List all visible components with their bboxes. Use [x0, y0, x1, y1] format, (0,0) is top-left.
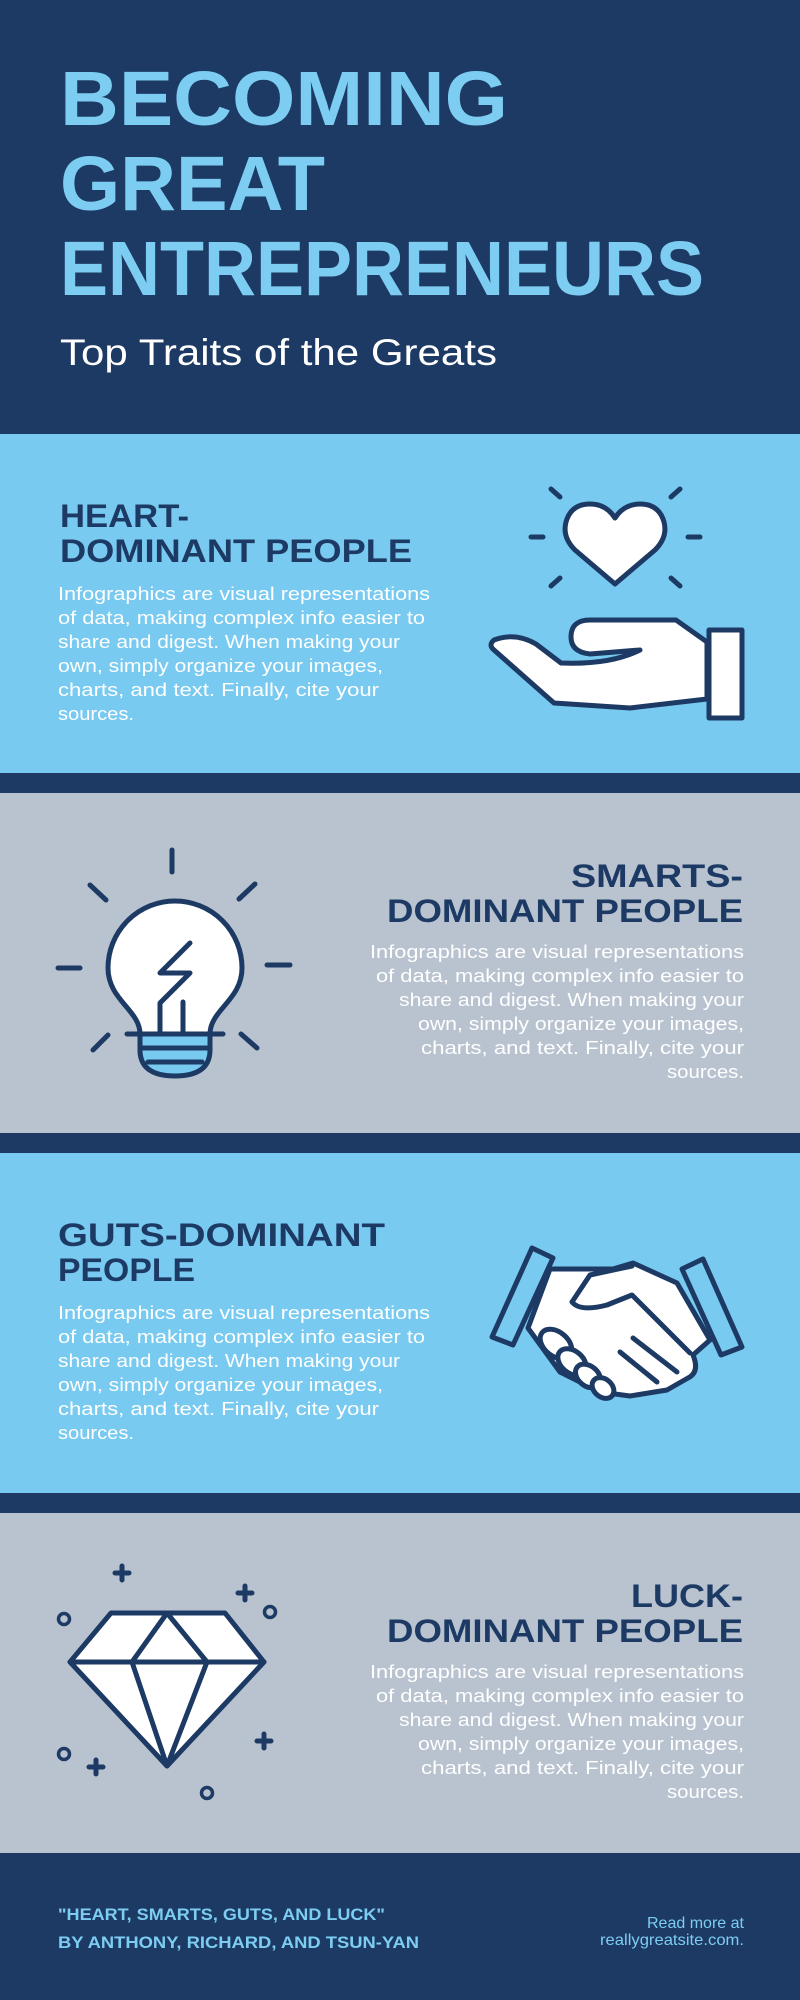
footer: [58, 1905, 745, 1952]
text block: luck: sources.: [667, 1782, 744, 1802]
text block: heart: Infographics are visual representations: [58, 584, 430, 604]
footer: read more: reallygreatsite.com.: [600, 1932, 744, 1949]
text block: smarts: [370, 942, 744, 1082]
panel: heart: [0, 434, 800, 773]
title: BECOMING: [60, 56, 508, 142]
heading: heart: [60, 498, 412, 569]
footer: read more: [600, 1915, 745, 1949]
title: [60, 56, 704, 312]
text block: guts: own, simply organize your images,: [58, 1375, 383, 1395]
heading: guts: [58, 1217, 386, 1288]
text block: luck: Infographics are visual representations: [370, 1662, 744, 1682]
text block: luck: [370, 1662, 744, 1802]
text block: heart: own, simply organize your images,: [58, 656, 383, 676]
text block: smarts: charts, and text. Finally, cite your: [421, 1038, 744, 1058]
text block: luck: charts, and text. Finally, cite your: [421, 1758, 744, 1778]
header: [60, 56, 704, 373]
panel: luck: [0, 1513, 800, 1853]
footer: source credit: "HEART, SMARTS, GUTS, AND LUCK": [58, 1905, 385, 1924]
text block: smarts: Infographics are visual representations: [370, 942, 744, 962]
icon: handshake: [492, 1248, 742, 1403]
footer: read more: Read more at: [647, 1915, 745, 1932]
heading: heart: HEART-: [60, 498, 189, 534]
text block: luck: of data, making complex info easier to: [376, 1686, 744, 1706]
title: ENTREPRENEURS: [60, 226, 704, 312]
footer: source credit: [58, 1905, 419, 1952]
heading: heart: DOMINANT PEOPLE: [60, 533, 412, 569]
subtitle: Top Traits of the Greats: [60, 332, 497, 373]
text block: guts: sources.: [58, 1423, 134, 1443]
text block: heart: of data, making complex info easier to: [58, 608, 425, 628]
text block: smarts: own, simply organize your images,: [418, 1014, 744, 1034]
footer: source credit: BY ANTHONY, RICHARD, AND TSUN-YAN: [58, 1933, 419, 1952]
text block: luck: share and digest. When making your: [399, 1710, 744, 1730]
title: GREAT: [60, 141, 325, 227]
text block: heart: sources.: [58, 704, 134, 724]
heading: luck: [387, 1578, 743, 1649]
heading: luck: LUCK-: [631, 1578, 743, 1614]
text block: guts: share and digest. When making your: [58, 1351, 400, 1371]
heading: smarts: SMARTS-: [571, 858, 743, 894]
text block: smarts: of data, making complex info easier to: [376, 966, 744, 986]
panel: smarts: [0, 793, 800, 1133]
text block: heart: [58, 584, 430, 724]
text block: luck: own, simply organize your images,: [418, 1734, 744, 1754]
heading: smarts: [387, 858, 743, 929]
icon: heart in hand: [491, 489, 742, 718]
text block: smarts: share and digest. When making your: [399, 990, 744, 1010]
text block: guts: of data, making complex info easier to: [58, 1327, 425, 1347]
heading: guts: GUTS-DOMINANT: [58, 1217, 386, 1253]
text block: smarts: sources.: [667, 1062, 744, 1082]
text block: guts: [58, 1303, 430, 1443]
icon: diamond: [58, 1566, 276, 1798]
panel: guts: [0, 1153, 800, 1493]
heading: guts: PEOPLE: [58, 1252, 195, 1288]
icon: light bulb: [58, 850, 290, 1076]
heading: smarts: DOMINANT PEOPLE: [387, 893, 743, 929]
text block: guts: charts, and text. Finally, cite your: [58, 1399, 379, 1419]
text block: heart: share and digest. When making your: [58, 632, 400, 652]
heading: luck: DOMINANT PEOPLE: [387, 1613, 743, 1649]
text block: heart: charts, and text. Finally, cite your: [58, 680, 379, 700]
text block: guts: Infographics are visual representations: [58, 1303, 430, 1323]
